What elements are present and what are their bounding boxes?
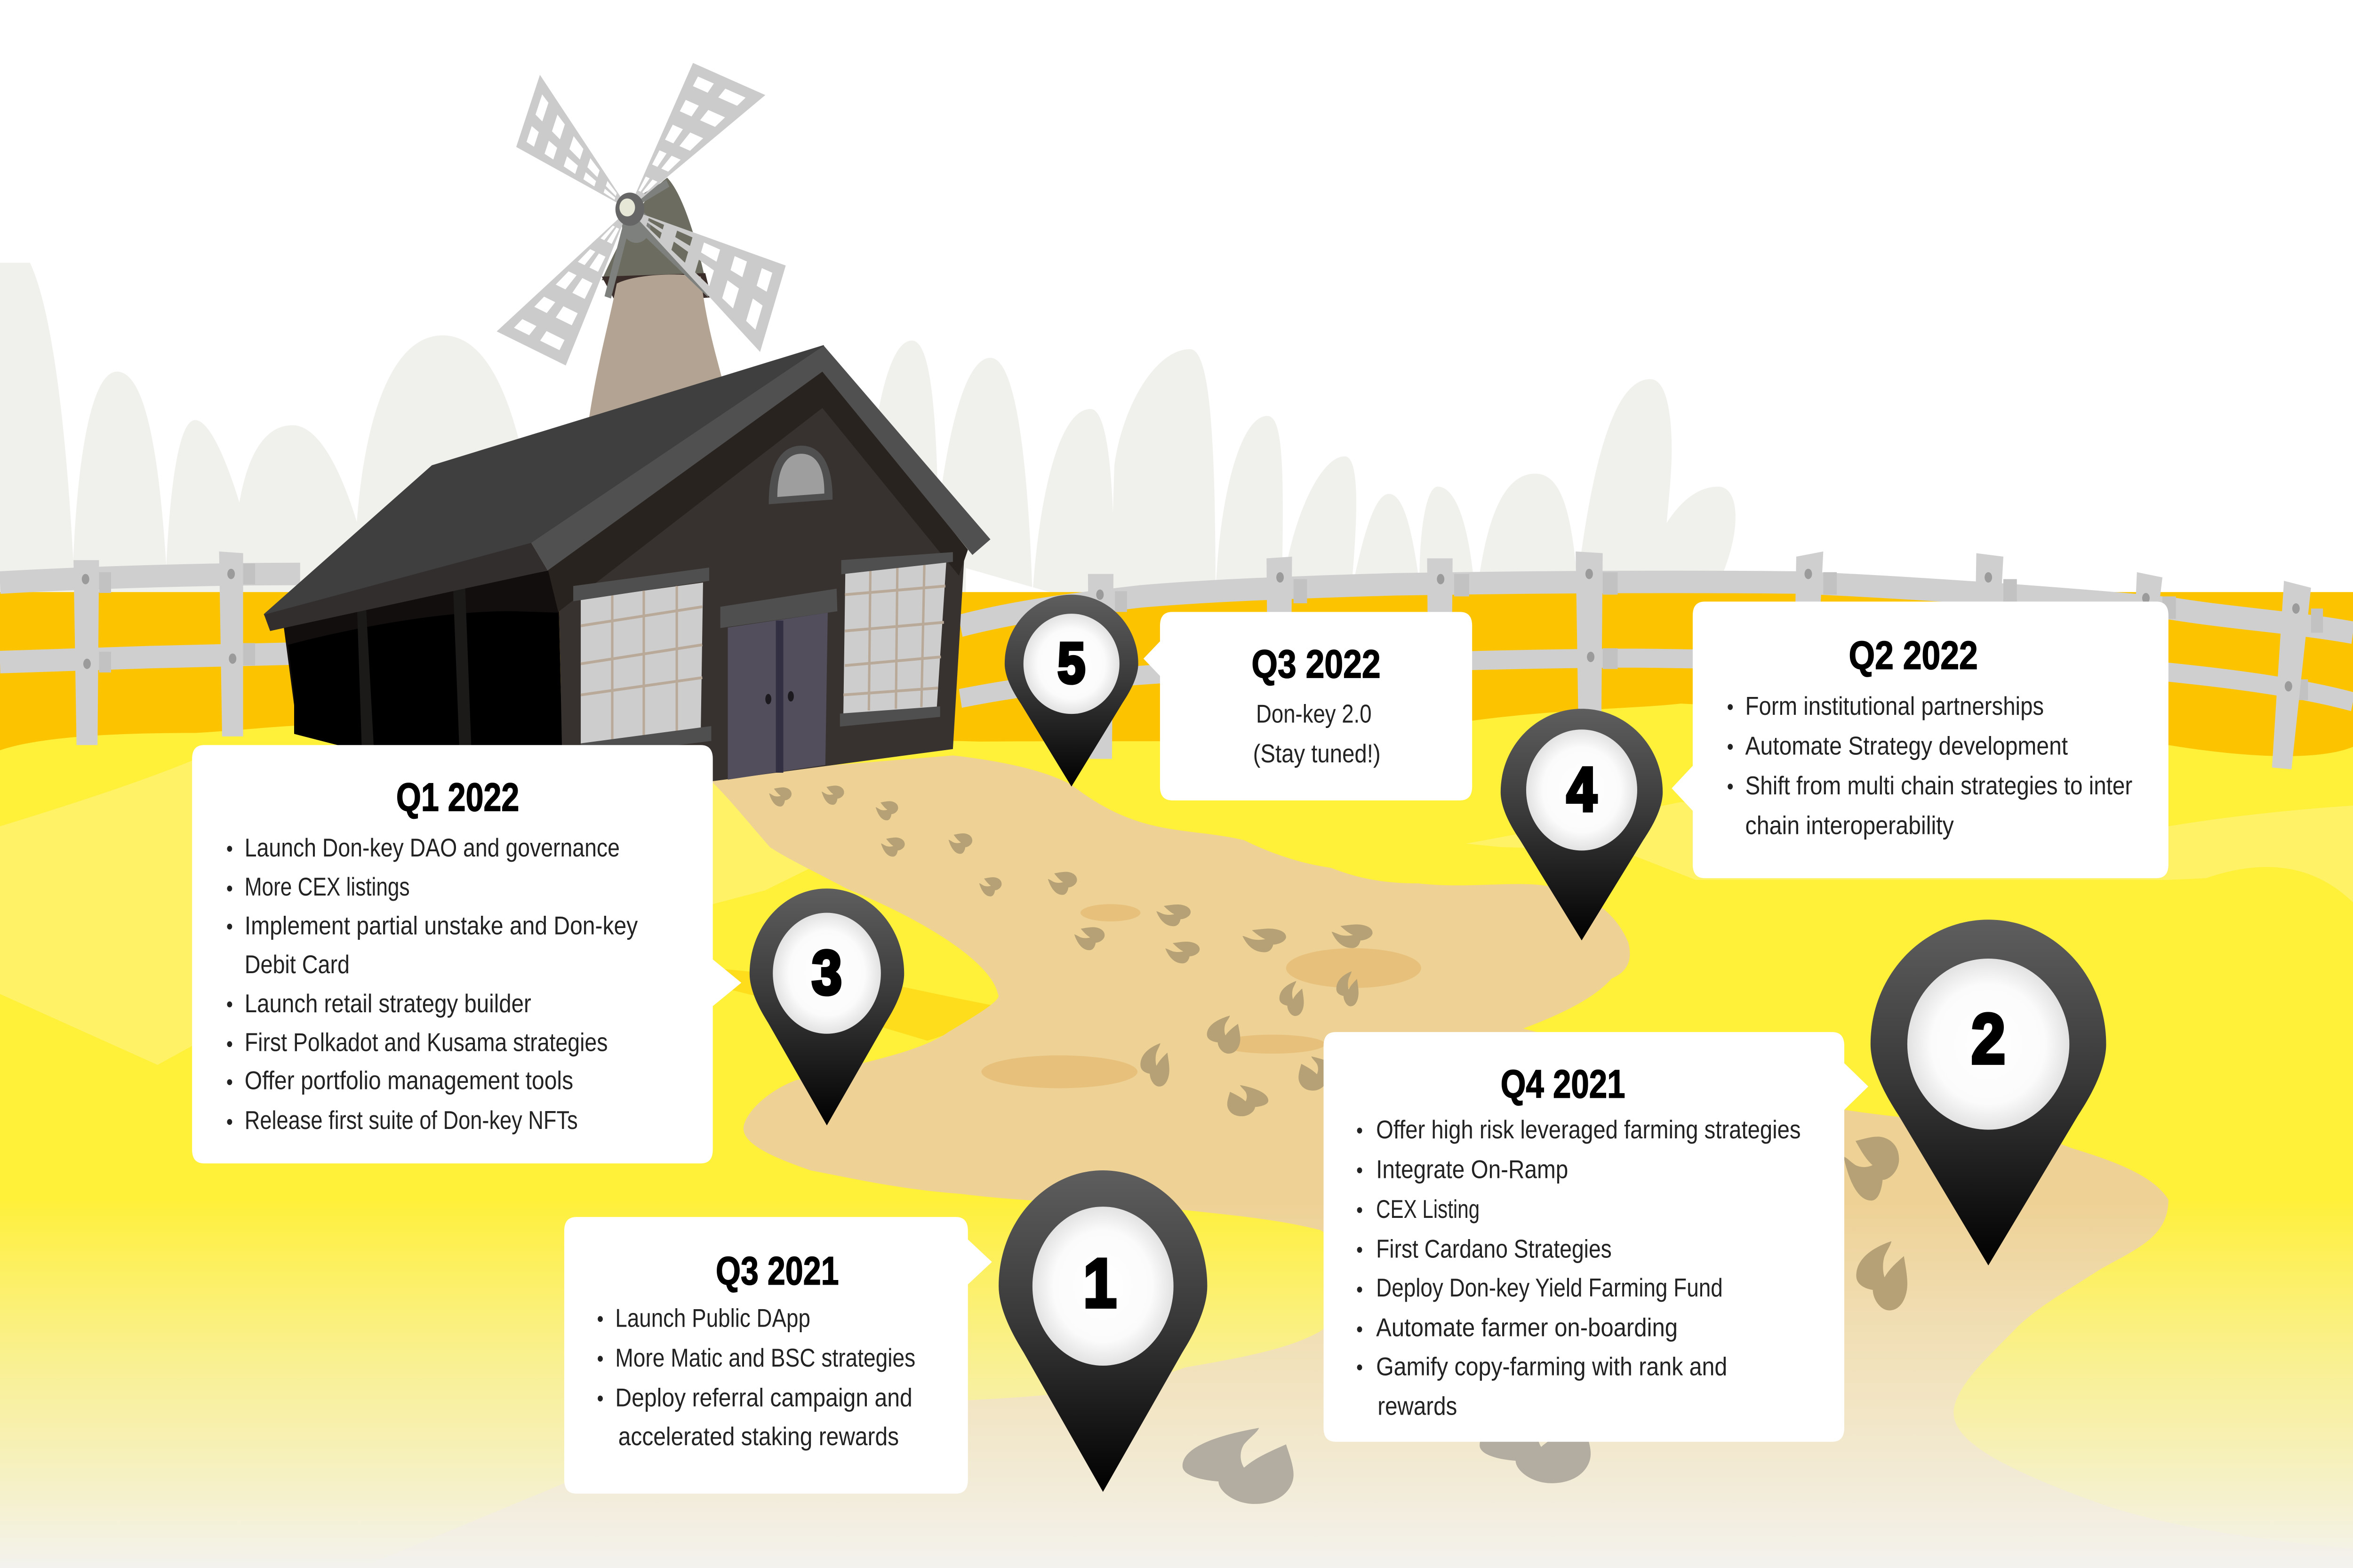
heading: Q1 2022 bbox=[396, 775, 519, 819]
right window muntins bbox=[843, 564, 945, 711]
heading: Q2 2022 bbox=[1849, 633, 1978, 678]
fence posts left bbox=[73, 552, 243, 745]
pin 4 bbox=[1501, 709, 1663, 940]
barn main roof bbox=[264, 346, 824, 615]
card shape bbox=[564, 1217, 992, 1494]
right window bottom sill bbox=[840, 706, 940, 727]
windmill bbox=[427, 0, 917, 488]
fence rail shadows left bbox=[99, 564, 255, 672]
bullet list: Launch Don-key DAO and governance bbox=[245, 833, 620, 862]
bullet list: Deploy referral campaign and bbox=[615, 1383, 912, 1412]
bullet list: accelerated staking rewards bbox=[618, 1422, 899, 1451]
bullet list: Automate Strategy development bbox=[1745, 731, 2068, 760]
card: Q4 2021 bbox=[1323, 1032, 1868, 1442]
sail upper left bbox=[427, 13, 629, 209]
pin 2 bbox=[1871, 920, 2106, 1265]
barn beams bbox=[357, 588, 471, 745]
windmill tower bbox=[588, 274, 725, 424]
bullet list: More Matic and BSC strategies bbox=[615, 1343, 915, 1372]
barn open side bbox=[284, 565, 563, 786]
left window bottom sill bbox=[581, 726, 711, 757]
barn door bbox=[720, 589, 837, 780]
barn gable roof edge bbox=[531, 346, 991, 570]
dirt patches bbox=[981, 904, 1421, 1088]
description: Don-key 2.0 bbox=[1256, 699, 1372, 728]
bullet list: Release first suite of Don-key NFTs bbox=[245, 1105, 578, 1135]
card shape bbox=[1323, 1032, 1868, 1442]
bullet list: Offer high risk leveraged farming strategies bbox=[1376, 1115, 1801, 1144]
light yellow patch left bbox=[0, 760, 818, 1065]
pin 4: 4 bbox=[1567, 755, 1597, 824]
light yellow patch right bbox=[1466, 802, 2353, 903]
bullet list bbox=[227, 833, 638, 1135]
pin 5: 5 bbox=[1058, 632, 1085, 696]
bullet list: Implement partial unstake and Don-key bbox=[245, 911, 638, 940]
barn open side interior bbox=[288, 611, 563, 749]
card: Q3 2021 bbox=[564, 1217, 992, 1494]
fence bolts right bbox=[1096, 569, 2300, 691]
left window glass bbox=[581, 583, 703, 744]
bullet list: First Cardano Strategies bbox=[1376, 1234, 1612, 1263]
fence left bbox=[0, 552, 300, 745]
tree line bbox=[0, 263, 1736, 596]
fence rails right bbox=[960, 582, 2353, 632]
pin 3: 3 bbox=[812, 938, 842, 1008]
pin 5 bbox=[1005, 595, 1138, 786]
fence right bbox=[960, 552, 2353, 769]
sail lower left bbox=[434, 209, 629, 488]
bullet list bbox=[598, 1303, 915, 1451]
ground fade bbox=[0, 1200, 2353, 1568]
attic window glass bbox=[777, 454, 824, 497]
left window muntins bbox=[581, 586, 702, 740]
pin 1 bbox=[999, 1170, 1207, 1492]
bullet list: More CEX listings bbox=[245, 872, 410, 901]
card shape bbox=[192, 745, 741, 1163]
fence rails left bbox=[0, 574, 300, 662]
windmill hub bbox=[616, 192, 644, 226]
orange field band bbox=[0, 592, 2353, 774]
left window bbox=[573, 568, 711, 757]
bullet list: Debit Card bbox=[245, 950, 350, 979]
door knobs bbox=[765, 691, 794, 704]
heading: Q3 2021 bbox=[716, 1248, 839, 1293]
yellow ground bbox=[0, 704, 2353, 1568]
white gap below trees bbox=[966, 568, 1053, 593]
barn bbox=[264, 346, 991, 786]
bullet list: Offer portfolio management tools bbox=[245, 1065, 573, 1095]
door centre strip bbox=[776, 621, 784, 773]
right window glass bbox=[843, 562, 946, 713]
bullet list: Deploy Don-key Yield Farming Fund bbox=[1376, 1273, 1723, 1302]
bullet list bbox=[1728, 691, 2132, 840]
barn eave bbox=[264, 543, 548, 631]
bullet list: Launch Public DApp bbox=[615, 1303, 810, 1332]
right window top sill bbox=[841, 552, 953, 574]
card: Q2 2022 bbox=[1672, 601, 2169, 878]
large hoofprints bbox=[1183, 1407, 1591, 1504]
dirt path bbox=[360, 755, 2353, 1568]
bullet list: Automate farmer on-boarding bbox=[1376, 1312, 1678, 1342]
sail upper right bbox=[629, 0, 830, 209]
right window bbox=[840, 552, 953, 727]
bullet list: Integrate On-Ramp bbox=[1376, 1154, 1568, 1184]
bullet list: Form institutional partnerships bbox=[1745, 691, 2044, 720]
pin 1: 1 bbox=[1083, 1245, 1117, 1322]
heading: Q4 2021 bbox=[1501, 1062, 1625, 1106]
windmill axle bbox=[622, 210, 650, 243]
bullet list: CEX Listing bbox=[1376, 1194, 1480, 1224]
bullet list bbox=[1357, 1115, 1801, 1420]
barn gable shadow bbox=[548, 368, 968, 612]
fence rail shadows right bbox=[1115, 572, 2323, 700]
fence bolts left bbox=[82, 569, 236, 669]
card shape bbox=[1144, 612, 1472, 800]
attic window bbox=[769, 446, 832, 504]
bullet list: rewards bbox=[1377, 1392, 1457, 1420]
hoofprints on path bbox=[769, 785, 1907, 1311]
pin 2: 2 bbox=[1971, 999, 2005, 1078]
description: (Stay tuned!) bbox=[1253, 739, 1381, 768]
door lintel bbox=[720, 589, 837, 628]
left window top sill bbox=[573, 568, 709, 601]
door panels bbox=[728, 613, 828, 780]
card: Q3 2022 bbox=[1144, 612, 1472, 800]
card: Q1 2022 bbox=[192, 745, 741, 1163]
windmill cap bbox=[602, 178, 708, 294]
windmill struts bbox=[608, 183, 710, 297]
description bbox=[1253, 699, 1381, 768]
pin 3 bbox=[750, 888, 904, 1125]
windmill hub centre bbox=[619, 199, 635, 216]
barn front wall bbox=[558, 372, 965, 786]
windmill cap band bbox=[602, 273, 711, 304]
sail lower right bbox=[629, 209, 917, 408]
bullet list: Launch retail strategy builder bbox=[245, 989, 531, 1018]
fence posts right bbox=[1088, 552, 2311, 769]
bullet list: chain interoperability bbox=[1745, 810, 1954, 840]
bullet list: Shift from multi chain strategies to inter bbox=[1745, 771, 2132, 800]
darker yellow patch bbox=[713, 968, 996, 1040]
bullet list: First Polkadot and Kusama strategies bbox=[245, 1027, 608, 1056]
heading: Q3 2022 bbox=[1251, 641, 1381, 686]
card shape bbox=[1672, 601, 2169, 878]
bullet list: Gamify copy-farming with rank and bbox=[1376, 1352, 1727, 1381]
